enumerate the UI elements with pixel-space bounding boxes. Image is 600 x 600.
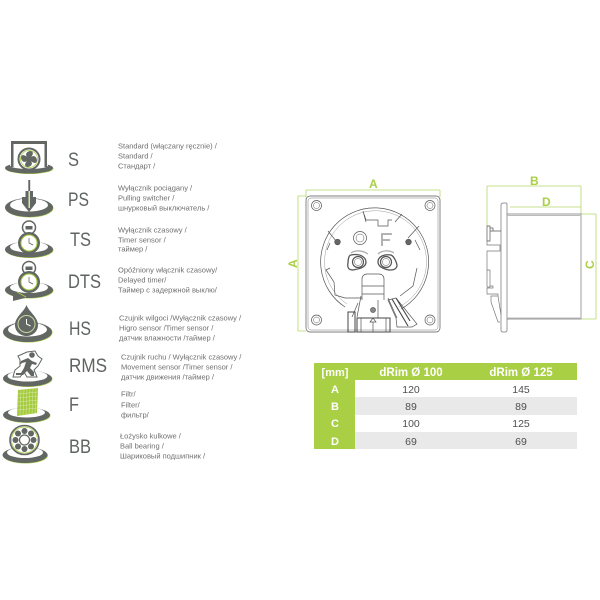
label: HS: HS bbox=[69, 319, 91, 340]
dimension: width A bbox=[306, 177, 440, 197]
row D: 69 bbox=[405, 436, 417, 448]
icon: humidity sensor bbox=[3, 305, 52, 342]
row D bbox=[331, 436, 527, 448]
table header: dRim Ø 100 bbox=[379, 367, 443, 379]
text: RMS description: Movement sensor /Timer sensor / bbox=[121, 362, 233, 372]
label: PS: PS bbox=[68, 190, 89, 211]
row B: B bbox=[331, 401, 339, 413]
text: F description: Filter/ bbox=[121, 400, 141, 410]
text: BB description: Ball bearing / bbox=[120, 442, 165, 450]
icon: standard fan bbox=[5, 141, 54, 174]
text: BB description bbox=[120, 432, 206, 460]
text: F description: Filtr/ bbox=[121, 390, 136, 398]
row C: 125 bbox=[512, 418, 530, 430]
row B: 89 bbox=[515, 401, 527, 413]
text: TS description: Wyłącznik czasowy / bbox=[118, 226, 188, 234]
fan front outline bbox=[306, 196, 440, 332]
dimension: C bbox=[581, 214, 597, 319]
dimension: height A bbox=[286, 196, 306, 331]
dimension: D: D bbox=[542, 195, 551, 209]
icon: motion sensor bbox=[3, 351, 52, 387]
label: DTS: DTS bbox=[68, 272, 101, 293]
text: S description: Standard (włączany ręcznie) / bbox=[118, 142, 218, 150]
text: HS description: датчик влажности /таймер / bbox=[119, 334, 216, 342]
row D: 69 bbox=[515, 436, 527, 448]
text: PS description bbox=[118, 184, 210, 212]
text: BB description: Łożysko kulkowe / bbox=[120, 432, 182, 440]
text: HS description: Czujnik wilgoci /Wyłącznik czasowy / bbox=[119, 314, 242, 322]
diagram: front view with dimensions bbox=[286, 177, 440, 332]
text: HS description: Higro sensor /Timer sensor / bbox=[119, 324, 214, 332]
text: S description bbox=[118, 142, 218, 170]
row D: D bbox=[331, 436, 339, 448]
row B: 89 bbox=[405, 401, 417, 413]
text: RMS description bbox=[121, 352, 242, 382]
diagram: side view with dimensions bbox=[487, 174, 597, 332]
dimension: B: B bbox=[530, 174, 539, 188]
row A: 145 bbox=[512, 384, 530, 396]
row C: C bbox=[331, 418, 339, 430]
text: DTS description: Delayed timer/ bbox=[118, 276, 167, 284]
row B bbox=[331, 401, 527, 413]
dimension: C: C bbox=[583, 260, 597, 269]
row A: 120 bbox=[402, 384, 420, 396]
text: BB description: Шариковый подшипник / bbox=[120, 452, 206, 460]
row A bbox=[331, 384, 530, 396]
table header: dRim Ø 125 bbox=[489, 367, 553, 379]
icon: pulling switch bbox=[5, 180, 54, 218]
dimension: D bbox=[510, 195, 581, 209]
table: dimensions bbox=[314, 363, 577, 449]
icon: delayed timer bbox=[5, 262, 54, 301]
text: F description bbox=[121, 390, 150, 420]
label: S: S bbox=[68, 150, 79, 171]
icon: ball bearing bbox=[2, 426, 48, 464]
dimension: B bbox=[487, 174, 581, 226]
text: TS description: Timer sensor / bbox=[118, 236, 167, 244]
dimension: height A: A bbox=[286, 259, 300, 268]
icon: timer bbox=[5, 221, 54, 258]
text: RMS description: Czujnik ruchu / Wyłącznik czasowy / bbox=[121, 352, 242, 362]
text: S description: Стандарт / bbox=[118, 162, 156, 170]
text: F description: фильтр/ bbox=[121, 410, 150, 420]
text: TS description: таймер / bbox=[118, 244, 148, 254]
text: PS description: Pulling switcher / bbox=[118, 194, 175, 202]
row C bbox=[331, 418, 530, 430]
text: HS description bbox=[119, 314, 242, 342]
text: DTS description: Opóźniony włącznik czasowy/ bbox=[118, 266, 218, 274]
text: PS description: шнурковый выключатель / bbox=[118, 204, 210, 212]
text: RMS description: датчик движения /таймер / bbox=[121, 372, 215, 382]
label: RMS: RMS bbox=[69, 356, 107, 377]
label: F: F bbox=[69, 395, 79, 416]
fan side outline bbox=[487, 203, 581, 332]
text: S description: Standard / bbox=[118, 152, 154, 160]
text: PS description: Wyłącznik pociągany / bbox=[118, 184, 193, 192]
row A: A bbox=[331, 384, 339, 396]
text: TS description bbox=[118, 226, 188, 254]
icon: filter bbox=[3, 388, 50, 423]
label: BB: BB bbox=[69, 437, 91, 458]
table header bbox=[314, 363, 577, 380]
label: TS: TS bbox=[70, 230, 91, 251]
table header: [mm] bbox=[322, 367, 349, 379]
text: DTS description: Таймер с задержной выклю/ bbox=[118, 286, 218, 294]
dimension: width A: A bbox=[369, 177, 378, 191]
row C: 100 bbox=[402, 418, 420, 430]
text: DTS description bbox=[118, 266, 218, 294]
